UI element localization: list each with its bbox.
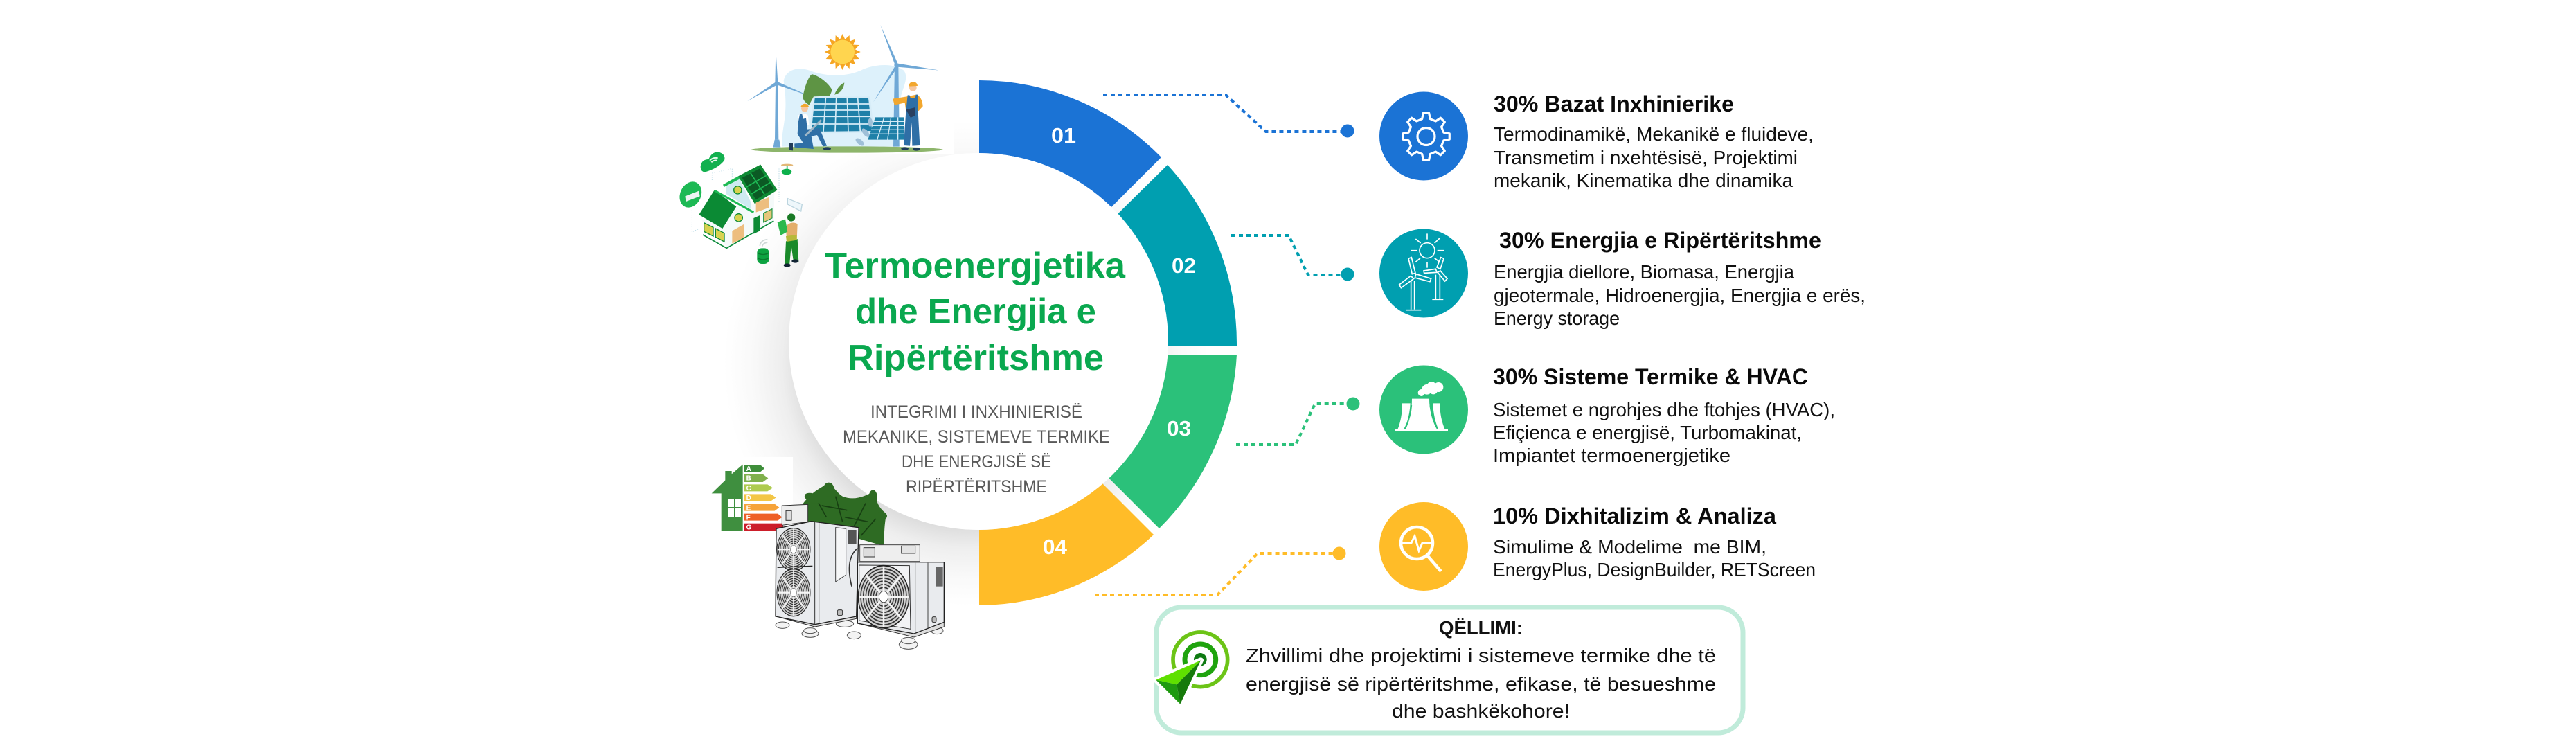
number 03: 03 xyxy=(1167,416,1191,440)
item 2 text xyxy=(1494,228,1866,329)
house walls xyxy=(701,193,774,247)
tall heat pump feet xyxy=(776,621,854,637)
main title: Termoenergjetika xyxy=(825,246,1126,286)
number 04: 04 xyxy=(1043,535,1068,559)
energy rating bars: E xyxy=(746,504,751,512)
energy rating bars: D xyxy=(746,495,751,502)
connector 03 xyxy=(1236,398,1360,445)
connector 04 xyxy=(1095,547,1346,595)
item 3 text xyxy=(1493,364,1835,466)
database barrel xyxy=(757,240,769,264)
energy rating bars: C xyxy=(746,485,751,492)
small solar panel xyxy=(868,117,904,140)
item 2 text: Energy storage xyxy=(1494,308,1620,329)
subtitle: DHE ENERGJISË SË xyxy=(902,452,1051,472)
donut ring chart xyxy=(979,80,1237,605)
subtitle: MEKANIKE, SISTEMEVE TERMIKE xyxy=(843,427,1110,447)
subtitle: RIPËRTËRITSHME xyxy=(906,477,1047,497)
subtitle: INTEGRIMI I INXHINIERISË xyxy=(870,402,1082,422)
goal text xyxy=(1246,645,1716,722)
energy rating bars: F xyxy=(746,514,751,522)
icon: magnifier with pulse xyxy=(1379,502,1468,591)
item 1 text: Termodinamikë, Mekanikë e fluideve, xyxy=(1494,123,1814,145)
left wind turbine xyxy=(747,50,809,148)
centre white circle xyxy=(789,153,1168,530)
illustration: smart green house xyxy=(676,152,802,267)
standing worker xyxy=(893,82,923,151)
item 1 text: Transmetim i nxehtësisë, Projektimi xyxy=(1494,147,1798,168)
right wind turbine xyxy=(873,25,938,147)
energy rating bars: B xyxy=(746,475,751,483)
segment 02 xyxy=(1117,165,1237,346)
number 01: 01 xyxy=(1051,123,1076,148)
item 2 text: Energjia diellore, Biomasa, Energjia xyxy=(1494,261,1794,283)
item 3 text: Sistemet e ngrohjes dhe ftohjes (HVAC), xyxy=(1493,399,1835,420)
connector 01 xyxy=(1103,95,1354,137)
item 4 text xyxy=(1493,504,1816,580)
item 3 text: 30% Sisteme Termike & HVAC xyxy=(1493,364,1808,389)
goal callout box xyxy=(1156,607,1743,733)
short heat pump feet xyxy=(847,627,943,649)
location pin xyxy=(781,164,793,175)
connector 02 xyxy=(1231,235,1354,281)
goal text: Zhvillimi dhe projektimi i sistemeve termike dhe të xyxy=(1246,645,1716,666)
air conditioner bubble xyxy=(676,178,706,211)
item 1 text: 30% Bazat Inxhinierike xyxy=(1494,91,1734,116)
item 4 text: Simulime & Modelime me BIM, xyxy=(1493,536,1766,558)
item 1 text: mekanik, Kinematika dhe dinamika xyxy=(1494,170,1793,191)
goal text: energjisë së ripërtëritshme, efikase, të besueshme xyxy=(1246,673,1716,695)
foreground plant xyxy=(855,118,873,148)
kneeling worker xyxy=(789,104,831,150)
item 1 text xyxy=(1494,91,1814,191)
big solar panel xyxy=(809,96,874,134)
item 2 text: 30% Energjia e Ripërtëritshme xyxy=(1499,228,1821,253)
item 4 text: 10% Dixhitalizim & Analiza xyxy=(1493,504,1776,528)
main title: dhe Energjia e xyxy=(855,292,1096,332)
segment 01 xyxy=(979,80,1161,208)
item 2 text: gjeotermale, Hidroenergjia, Energjia e erës, xyxy=(1494,285,1866,306)
ground xyxy=(751,146,943,153)
icon: gear xyxy=(1379,91,1468,180)
subtitle xyxy=(843,402,1110,497)
goal heading: QËLLIMI: xyxy=(1439,617,1523,639)
item 3 text: Impiantet termoenergjetike xyxy=(1493,445,1730,466)
item 4 text: EnergyPlus, DesignBuilder, RETScreen xyxy=(1493,559,1816,580)
energy label house xyxy=(712,465,743,531)
dotted guides xyxy=(692,168,779,232)
centre circle soft shadow xyxy=(724,121,1208,606)
short heat pump xyxy=(849,545,944,637)
tall heat pump xyxy=(776,504,859,627)
segment 04 xyxy=(979,483,1154,605)
main title: Ripërtëritshme xyxy=(848,338,1104,378)
icon: cooling tower xyxy=(1379,366,1468,454)
energy rating bars: G xyxy=(746,524,752,532)
item 3 text: Efiçienca e energjisë, Turbomakinat, xyxy=(1493,422,1802,443)
leaves xyxy=(803,74,844,105)
energy rating bars xyxy=(744,465,783,532)
front roof xyxy=(699,190,753,229)
cloud bubble xyxy=(701,152,724,172)
house base line xyxy=(703,221,773,248)
windows and doors xyxy=(704,186,772,244)
number 02: 02 xyxy=(1172,253,1196,278)
main title xyxy=(825,246,1126,378)
icon: target with arrow xyxy=(1156,632,1228,704)
goal text: dhe bashkëkohore! xyxy=(1392,700,1570,722)
segment 03 xyxy=(1108,355,1237,528)
illustration: energy label and heat pumps xyxy=(712,465,944,649)
icon: sun and wind turbines xyxy=(1379,229,1468,317)
energy rating bars: A xyxy=(746,465,751,473)
illustration: solar panels and wind turbines with workers xyxy=(747,25,943,153)
speech bubble xyxy=(787,199,802,211)
person with tablet xyxy=(778,213,798,267)
foliage xyxy=(803,483,887,546)
background blob xyxy=(782,65,906,147)
sun xyxy=(825,34,861,70)
solar roof xyxy=(723,165,778,204)
